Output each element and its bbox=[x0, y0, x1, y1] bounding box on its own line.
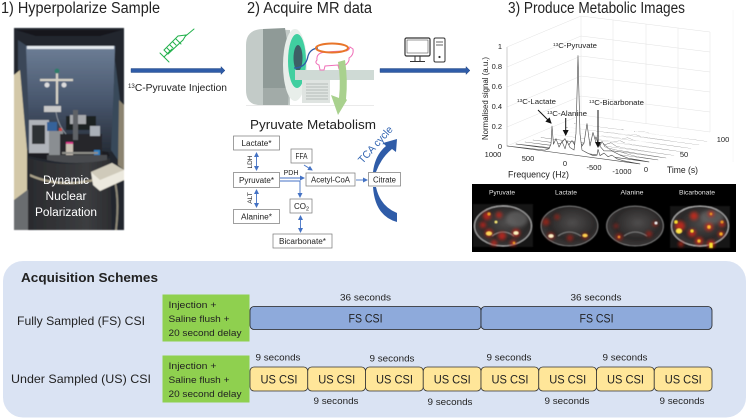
timeline: under sampled: 9 seconds bbox=[314, 396, 359, 407]
box: pyruvate: Pyruvate* bbox=[239, 176, 274, 185]
x axis title: Frequency (Hz) bbox=[508, 170, 569, 180]
timeline: under sampled: US CSI bbox=[376, 372, 413, 386]
pig bbox=[316, 47, 353, 70]
peak labels: C-Bicarbonate bbox=[594, 98, 644, 107]
peak labels: 13 bbox=[589, 99, 595, 104]
timeline: fully sampled: 36 seconds bbox=[340, 292, 391, 304]
label: LDH: LDH bbox=[247, 155, 254, 169]
timeline: under sampled: 9 seconds bbox=[602, 352, 648, 364]
TCA cycle upper arc bbox=[373, 139, 397, 172]
timeline: under sampled: 9 seconds bbox=[370, 354, 415, 364]
timeline: under sampled: 9 seconds bbox=[428, 397, 473, 408]
axis ticks and labels: 1 bbox=[498, 42, 502, 51]
green arrow bbox=[331, 60, 347, 115]
axis ticks and labels: 1000 bbox=[485, 150, 501, 159]
box: US injection delay: Saline flush + bbox=[168, 375, 230, 386]
image: alanine bbox=[606, 206, 664, 246]
time axis title: Time (s) bbox=[667, 165, 698, 175]
image: pyruvate bbox=[473, 204, 533, 247]
peak labels: 13 bbox=[517, 98, 523, 103]
y axis title: Normalised signal (a.u.) bbox=[480, 57, 490, 140]
chart: 3D time-resolved spectra bbox=[480, 10, 733, 180]
box: CO2: 2 bbox=[306, 206, 309, 212]
box: FS injection delay: Saline flush + bbox=[168, 314, 230, 325]
image labels: Alanine bbox=[620, 190, 644, 196]
timeline: under sampled: US CSI bbox=[665, 372, 702, 386]
row label: under sampled: Under Sampled (US) CSI bbox=[11, 372, 151, 386]
spectra traces bbox=[507, 46, 707, 164]
icon: syringe bbox=[160, 29, 194, 62]
panel: metabolic images bbox=[472, 184, 736, 252]
box: lactate bbox=[234, 136, 280, 150]
axis ticks and labels: 0 bbox=[498, 142, 502, 151]
axis ticks and labels: 0.4 bbox=[492, 102, 502, 111]
axis ticks and labels: 0.2 bbox=[492, 122, 502, 131]
timeline: fully sampled: 36 seconds bbox=[570, 292, 622, 304]
connector arrows bbox=[256, 153, 367, 232]
TCA cycle lower arc bbox=[373, 187, 397, 222]
row label: fully sampled: Fully Sampled (FS) CSI bbox=[17, 314, 145, 328]
heading: step 3: 3) Produce Metabolic Images bbox=[508, 0, 685, 17]
label: ALT: ALT bbox=[247, 192, 254, 204]
diagram: metabolic pathway bbox=[234, 124, 400, 248]
image: bicarbonate bbox=[670, 206, 730, 248]
peak labels: C-Pyruvate bbox=[558, 41, 597, 50]
photo: dynamic nuclear polarization system bbox=[14, 28, 124, 230]
photo caption: Polarization bbox=[35, 207, 97, 219]
timeline: under sampled: US CSI bbox=[434, 372, 471, 386]
axis ticks and labels: 0 bbox=[563, 159, 567, 168]
axis ticks and labels: 500 bbox=[522, 154, 534, 163]
image labels: Pyruvate bbox=[489, 190, 515, 196]
box: CO2 bbox=[290, 199, 312, 213]
arrow: injection bbox=[131, 66, 225, 74]
box: citrate: Citrate bbox=[373, 176, 397, 184]
timeline: under sampled: 9 seconds bbox=[256, 352, 301, 364]
timeline: under sampled: US CSI bbox=[260, 372, 298, 386]
peak labels: 13 bbox=[553, 42, 559, 47]
peak arrows bbox=[538, 110, 598, 147]
chart grid bbox=[507, 10, 733, 162]
axis ticks and labels: 50 bbox=[680, 150, 688, 159]
box: alanine: Alanine* bbox=[241, 212, 272, 222]
axis ticks and labels: -500 bbox=[586, 163, 602, 172]
box: FS injection delay: Injection + bbox=[168, 300, 217, 311]
timeline: under sampled: US CSI bbox=[549, 372, 586, 386]
label: PDH: PDH bbox=[284, 170, 298, 177]
peak labels bbox=[517, 41, 644, 118]
box: citrate bbox=[368, 172, 400, 186]
box: US injection delay bbox=[162, 356, 250, 402]
timeline: under sampled: 9 seconds bbox=[544, 396, 590, 407]
peak labels: 13 bbox=[547, 110, 553, 115]
axis ticks and labels: 0.6 bbox=[492, 82, 502, 91]
icon: computer bbox=[405, 38, 445, 62]
box: lactate: Lactate* bbox=[242, 139, 272, 148]
panel heading: Acquisition Schemes bbox=[21, 270, 158, 285]
photo caption: Nuclear bbox=[46, 191, 87, 203]
heading: step 1: 1) Hyperpolarize Sample bbox=[1, 0, 160, 17]
box: alanine bbox=[234, 210, 280, 224]
timeline: under sampled: 9 seconds bbox=[660, 396, 705, 407]
axis ticks and labels: -1000 bbox=[612, 167, 632, 176]
label: 13C-Pyruvate injection: 13 bbox=[128, 84, 136, 90]
box: CO2: CO bbox=[294, 202, 306, 211]
illustration: MRI scanner with pig bbox=[246, 28, 374, 115]
timeline: fully sampled bbox=[250, 292, 712, 330]
timeline: fully sampled: FS CSI bbox=[580, 312, 614, 326]
axis ticks and labels: 100 bbox=[717, 135, 729, 144]
coil bbox=[316, 44, 348, 52]
box: FS injection delay bbox=[162, 294, 250, 342]
box: acetyl-CoA bbox=[306, 173, 355, 186]
box: US injection delay: 20 second delay bbox=[168, 389, 242, 400]
axis ticks and labels bbox=[485, 42, 729, 176]
image: lactate bbox=[541, 206, 598, 246]
box: FFA: FFA bbox=[296, 152, 308, 161]
heading: step 2: 2) Acquire MR data bbox=[247, 0, 372, 17]
photo caption bbox=[35, 175, 97, 219]
image labels bbox=[489, 190, 715, 196]
box: bicarbonate bbox=[273, 234, 332, 248]
axis ticks and labels: 0 bbox=[644, 165, 648, 174]
peak labels: C-Alanine bbox=[552, 109, 587, 118]
image labels: Bicarbonate bbox=[679, 190, 715, 196]
box: FFA bbox=[291, 149, 312, 163]
box: US injection delay: Injection + bbox=[168, 361, 217, 372]
timeline: fully sampled: FS CSI bbox=[348, 312, 382, 326]
image labels: Lactate bbox=[555, 190, 577, 196]
box: acetyl-CoA: Acetyl-CoA bbox=[311, 176, 351, 184]
panel: acquisition schemes bbox=[3, 261, 746, 418]
photo caption: Dynamic bbox=[43, 175, 89, 187]
label: 13C-Pyruvate injection: C-Pyruvate Injection bbox=[135, 83, 227, 94]
timeline: under sampled bbox=[250, 352, 712, 408]
arrow: acquisition to images bbox=[380, 66, 470, 74]
axis ticks and labels: 0.8 bbox=[492, 62, 502, 71]
box: FS injection delay: 20 second delay bbox=[168, 328, 242, 339]
timeline: under sampled: US CSI bbox=[607, 372, 644, 386]
box: pyruvate bbox=[234, 172, 280, 188]
label: TCA cycle: TCA cycle bbox=[356, 124, 396, 166]
timeline: under sampled: 9 seconds bbox=[486, 352, 532, 364]
peak labels: C-Lactate bbox=[522, 97, 556, 106]
heading: pyruvate metabolism: Pyruvate Metabolism bbox=[250, 117, 376, 132]
timeline: under sampled: US CSI bbox=[492, 372, 528, 386]
timeline: under sampled: US CSI bbox=[318, 372, 355, 386]
box: bicarbonate: Bicarbonate* bbox=[279, 237, 326, 246]
